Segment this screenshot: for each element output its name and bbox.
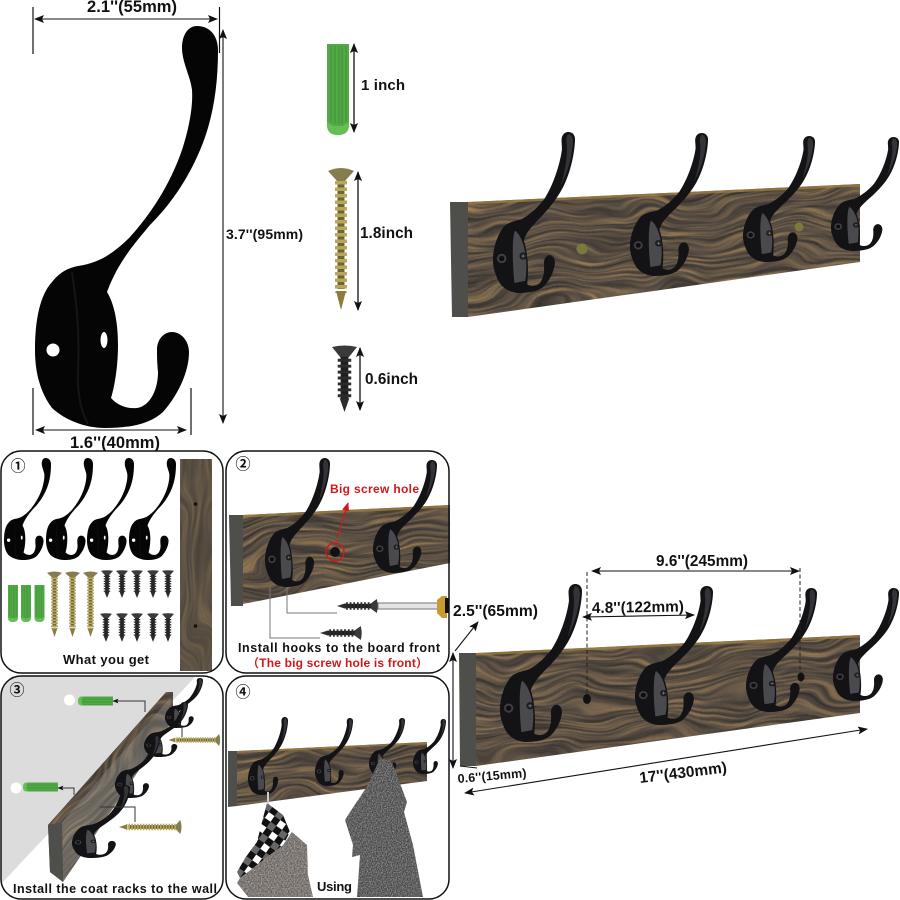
large hook with dimensions	[33, 0, 303, 452]
dimension: anchor 1 inch: 1 inch	[361, 77, 405, 94]
board front wood	[243, 505, 450, 604]
step number 1: ①	[10, 458, 26, 475]
angled board	[48, 692, 173, 882]
leader lines	[270, 587, 337, 638]
four angled hooks	[72, 678, 203, 858]
icon: gold screw	[328, 168, 354, 310]
grey wall	[1, 676, 195, 882]
frame 3	[1, 676, 223, 899]
hook 2	[635, 586, 713, 725]
caption: Install the coat racks to the wall	[13, 882, 217, 896]
label: big screw hole: Big screw hole	[330, 482, 419, 496]
caption line 1: Install hooks to the board front	[238, 641, 441, 655]
upper wall hole and anchor	[64, 694, 145, 712]
board front wood	[476, 635, 860, 766]
hook 1	[500, 584, 582, 742]
four hooks	[4, 458, 176, 560]
coat rack with dimensions, lower right	[449, 554, 899, 796]
board end face	[229, 515, 243, 606]
panel 1: what you get	[4, 458, 212, 671]
frame 1	[1, 451, 223, 673]
frame 4	[226, 676, 449, 899]
step number 4: ④	[235, 684, 251, 701]
icon: green wall anchor	[327, 44, 349, 135]
board front wood	[468, 184, 860, 317]
panel 2: install hooks	[229, 456, 450, 670]
dimension: 17 inch length: 17''(430mm)	[638, 759, 728, 787]
three green anchors	[8, 585, 44, 622]
hook 3	[743, 136, 815, 262]
hook 1	[493, 132, 575, 293]
checked scarf	[237, 792, 290, 878]
lower gold screw	[119, 820, 182, 834]
lower wall hole and anchor	[10, 782, 74, 795]
vertical wooden board	[180, 459, 212, 671]
hooks	[248, 717, 446, 795]
leader lines	[100, 727, 182, 822]
big screw hole marker	[326, 503, 348, 561]
caption: Using	[317, 879, 352, 894]
frame 2	[226, 451, 449, 673]
board end face	[228, 751, 237, 807]
dimension: 4.8 inch spacing: 4.8''(122mm)	[592, 598, 684, 617]
hook 4	[833, 588, 899, 701]
dimension: anchor 1 inch	[354, 44, 405, 132]
icon: large black hook	[35, 26, 218, 428]
dimension: gold screw 1.8 inch	[358, 172, 413, 310]
dimension: 0.6 inch thickness: 0.6''(15mm)	[457, 766, 527, 786]
icon: black screw	[332, 345, 357, 412]
mounting hole left	[583, 694, 591, 704]
upper gold screw	[168, 734, 220, 746]
dimension: 9.6 inch spacing: 9.6''(245mm)	[656, 553, 748, 570]
caption: What you get	[63, 652, 150, 667]
dimension: base width	[33, 388, 191, 452]
dimension: gold screw 1.8 inch: 1.8inch	[360, 225, 413, 242]
dimension: hook height: 3.7''(95mm)	[226, 226, 303, 242]
panel 4: using	[228, 684, 446, 897]
step number 2: ②	[235, 456, 251, 473]
dimension: base width: 1.6''(40mm)	[70, 434, 160, 452]
dimension: black screw 0.6 inch	[360, 348, 418, 410]
hook 4	[831, 137, 899, 251]
board end face	[459, 653, 476, 766]
panel frames	[1, 451, 449, 899]
coat rack photo, top right	[450, 132, 899, 317]
mounting hole right	[798, 672, 804, 682]
dimension: hook width	[33, 0, 220, 54]
dimension: 2.5 inch height: 2.5''(65mm)	[453, 603, 538, 620]
caption line 2: （The big screw hole is front）	[247, 656, 428, 670]
board front wood	[237, 742, 427, 806]
ten black screws	[100, 570, 174, 642]
step number 3: ③	[9, 682, 25, 699]
hardware sizes column	[327, 44, 418, 412]
screw lower	[320, 626, 362, 640]
hook right	[373, 460, 437, 573]
hook 2	[630, 133, 708, 276]
three gold screws	[47, 571, 98, 637]
dimension: 2.5 inch height	[453, 603, 538, 768]
screw: left gold	[576, 244, 588, 254]
grey scarf	[237, 832, 313, 897]
dimension: black screw 0.6 inch: 0.6inch	[365, 371, 418, 388]
dashed guide lines	[587, 568, 800, 694]
screwdriver with screw	[337, 596, 449, 618]
board end face	[450, 202, 468, 317]
dimension: 17 inch length	[465, 729, 867, 793]
hook left	[265, 458, 330, 587]
hook 3	[746, 588, 817, 712]
grey coat	[345, 758, 423, 897]
panel 3: install to wall	[2, 676, 220, 893]
screw: right gold	[794, 222, 804, 232]
